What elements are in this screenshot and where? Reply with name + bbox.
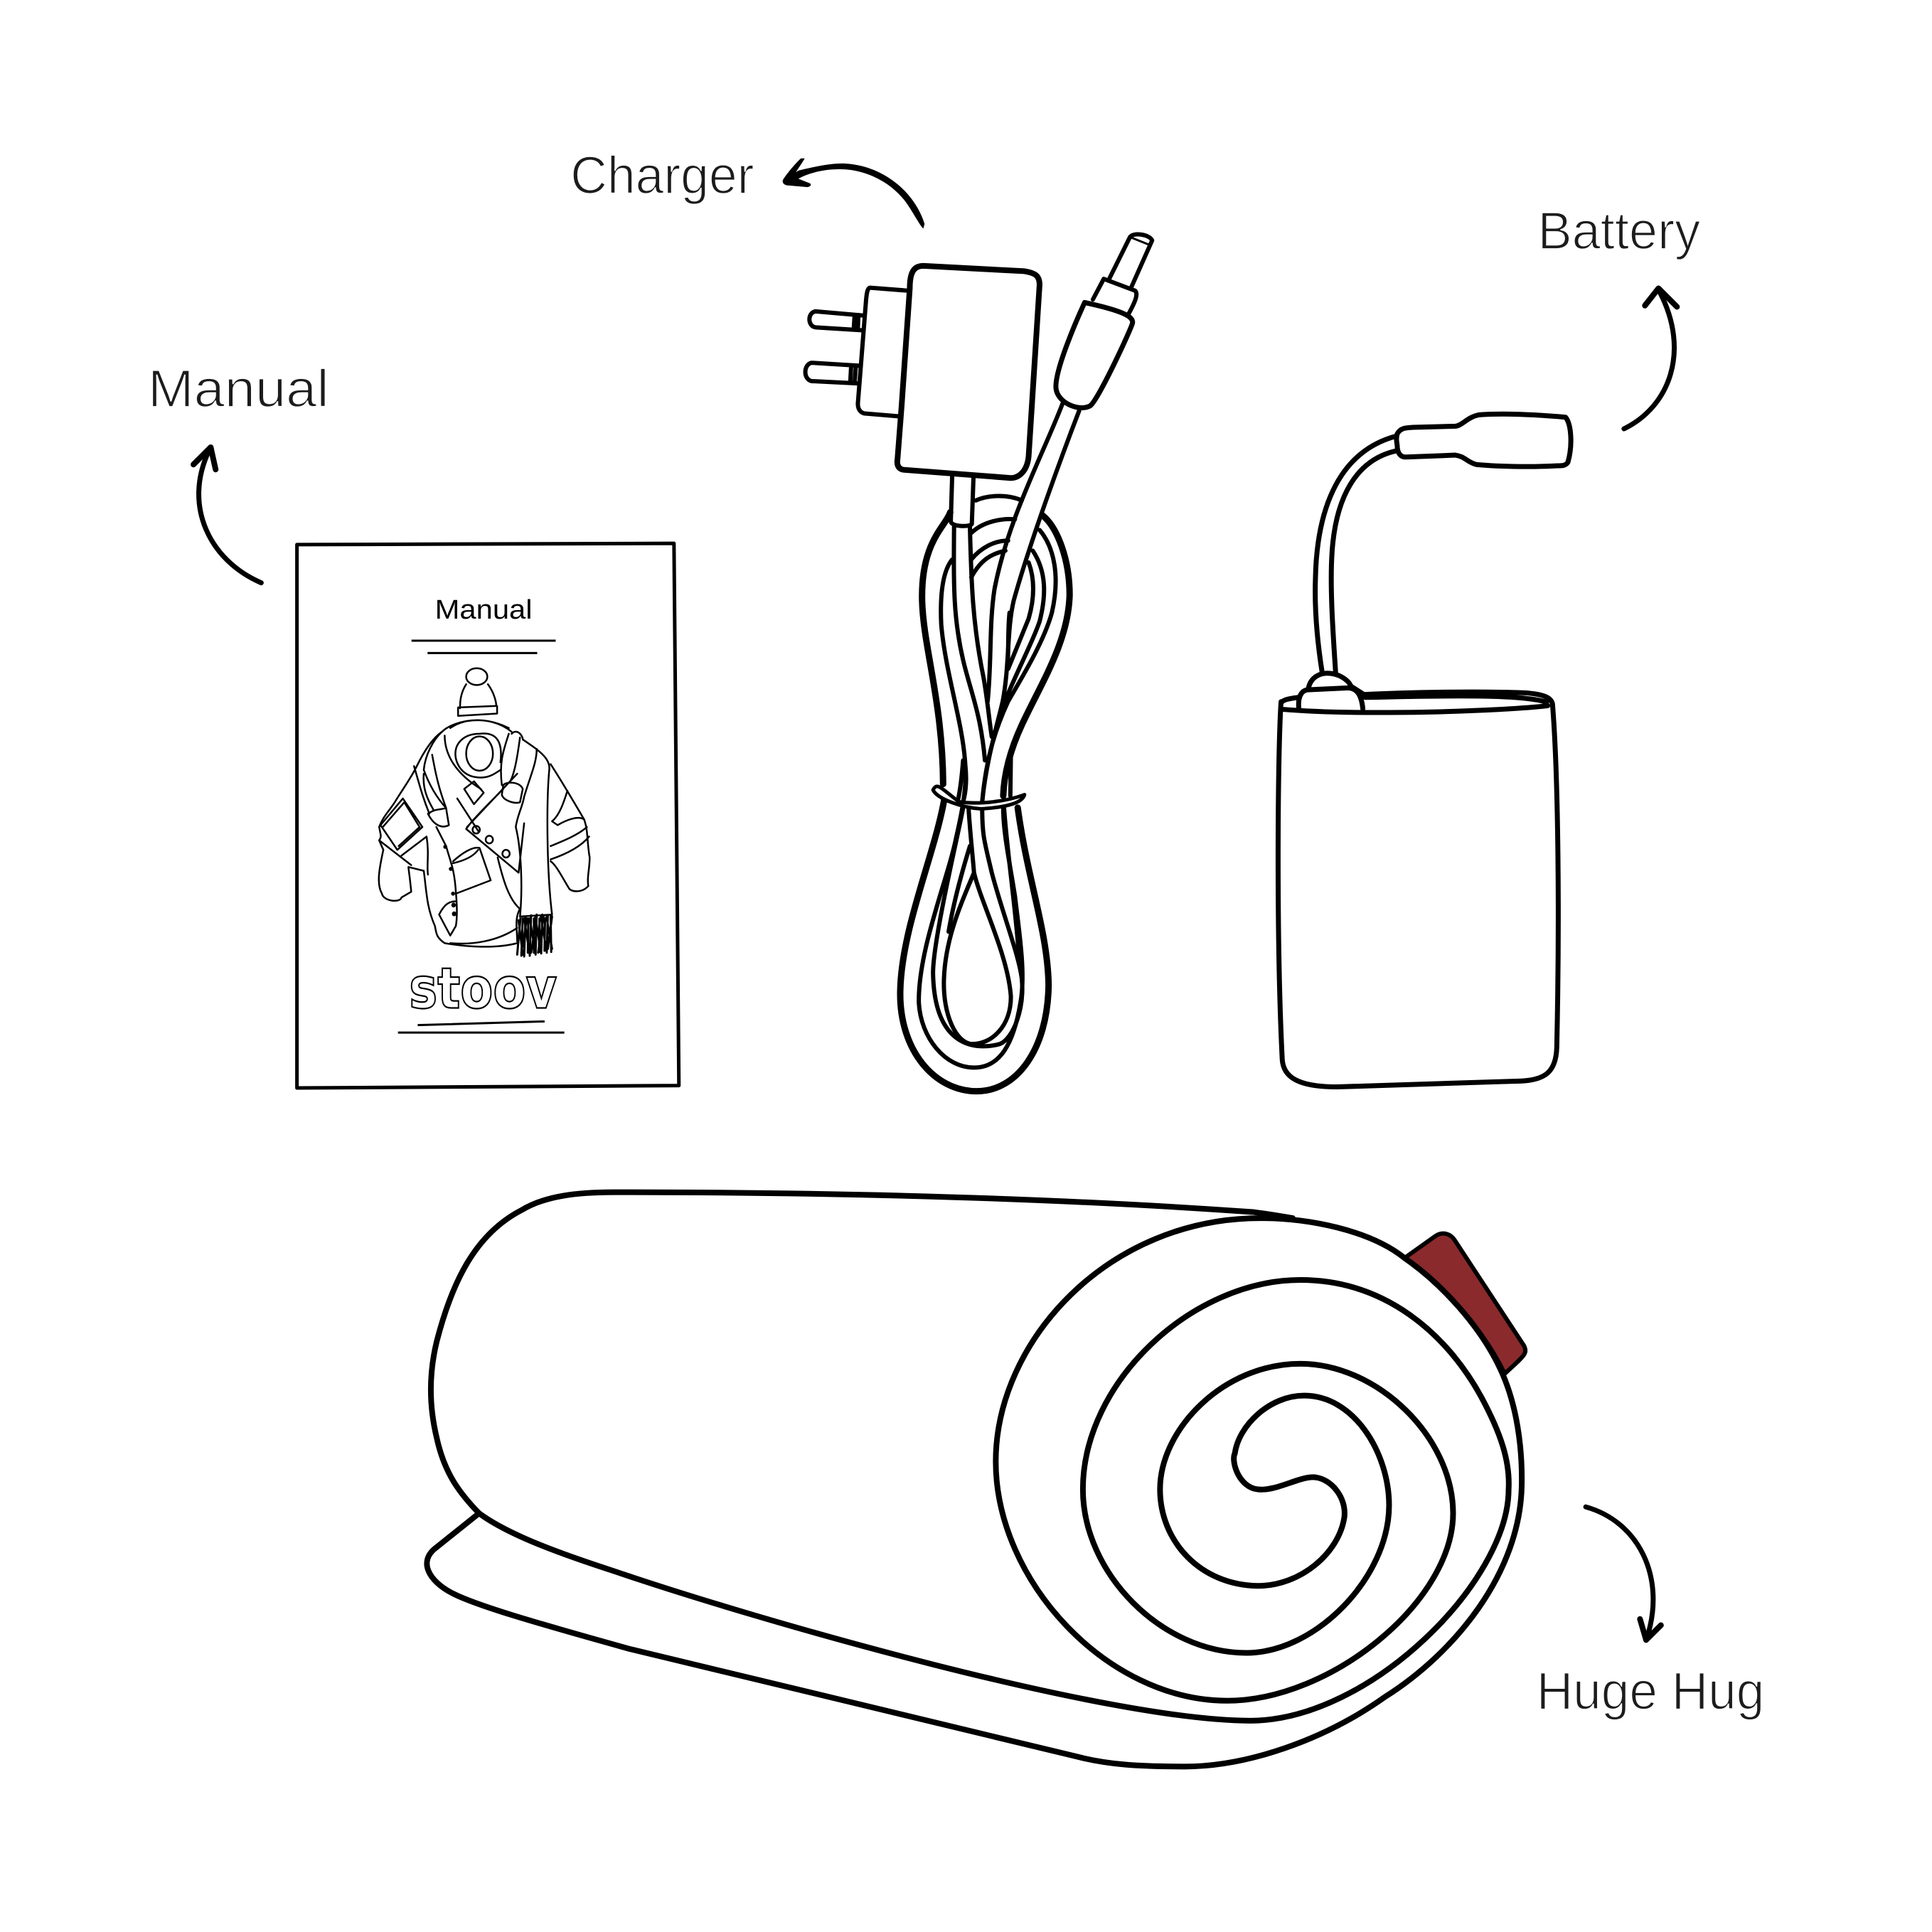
battery connector — [1298, 673, 1364, 709]
arrow: battery — [1624, 288, 1677, 429]
label: Huge Hug: Huge Hug — [1537, 1661, 1764, 1720]
label: Charger: Charger — [570, 146, 754, 205]
spiral outer arm — [427, 1218, 1522, 1766]
label: Manual: Manual — [148, 359, 329, 418]
battery plug — [1397, 414, 1571, 466]
battery cable — [1315, 436, 1396, 672]
manual booklet — [297, 543, 679, 1088]
stoov logo: stoov — [409, 955, 557, 1021]
DC barrel connector — [1056, 235, 1152, 407]
title underlines — [412, 641, 555, 653]
charger — [806, 235, 1152, 1092]
arrow: manual — [193, 447, 261, 583]
battery — [1278, 414, 1571, 1087]
adapter body — [897, 266, 1040, 478]
jacket illustration — [379, 668, 589, 956]
coiled cable — [900, 403, 1079, 1092]
arrow: charger — [783, 159, 924, 228]
label: Battery: Battery — [1538, 201, 1701, 260]
logo underlines — [398, 1021, 565, 1032]
battery body — [1278, 692, 1558, 1087]
red tab — [1404, 1234, 1525, 1374]
cable tie — [933, 786, 1025, 808]
booklet title: Manual — [435, 594, 533, 625]
blanket top edge — [431, 1192, 1293, 1513]
spiral inner arm — [479, 1280, 1509, 1721]
wall plug prongs — [806, 288, 909, 417]
booklet cover — [297, 543, 679, 1088]
arrow: huge hug — [1586, 1507, 1661, 1640]
huge hug rolled blanket — [427, 1192, 1525, 1766]
